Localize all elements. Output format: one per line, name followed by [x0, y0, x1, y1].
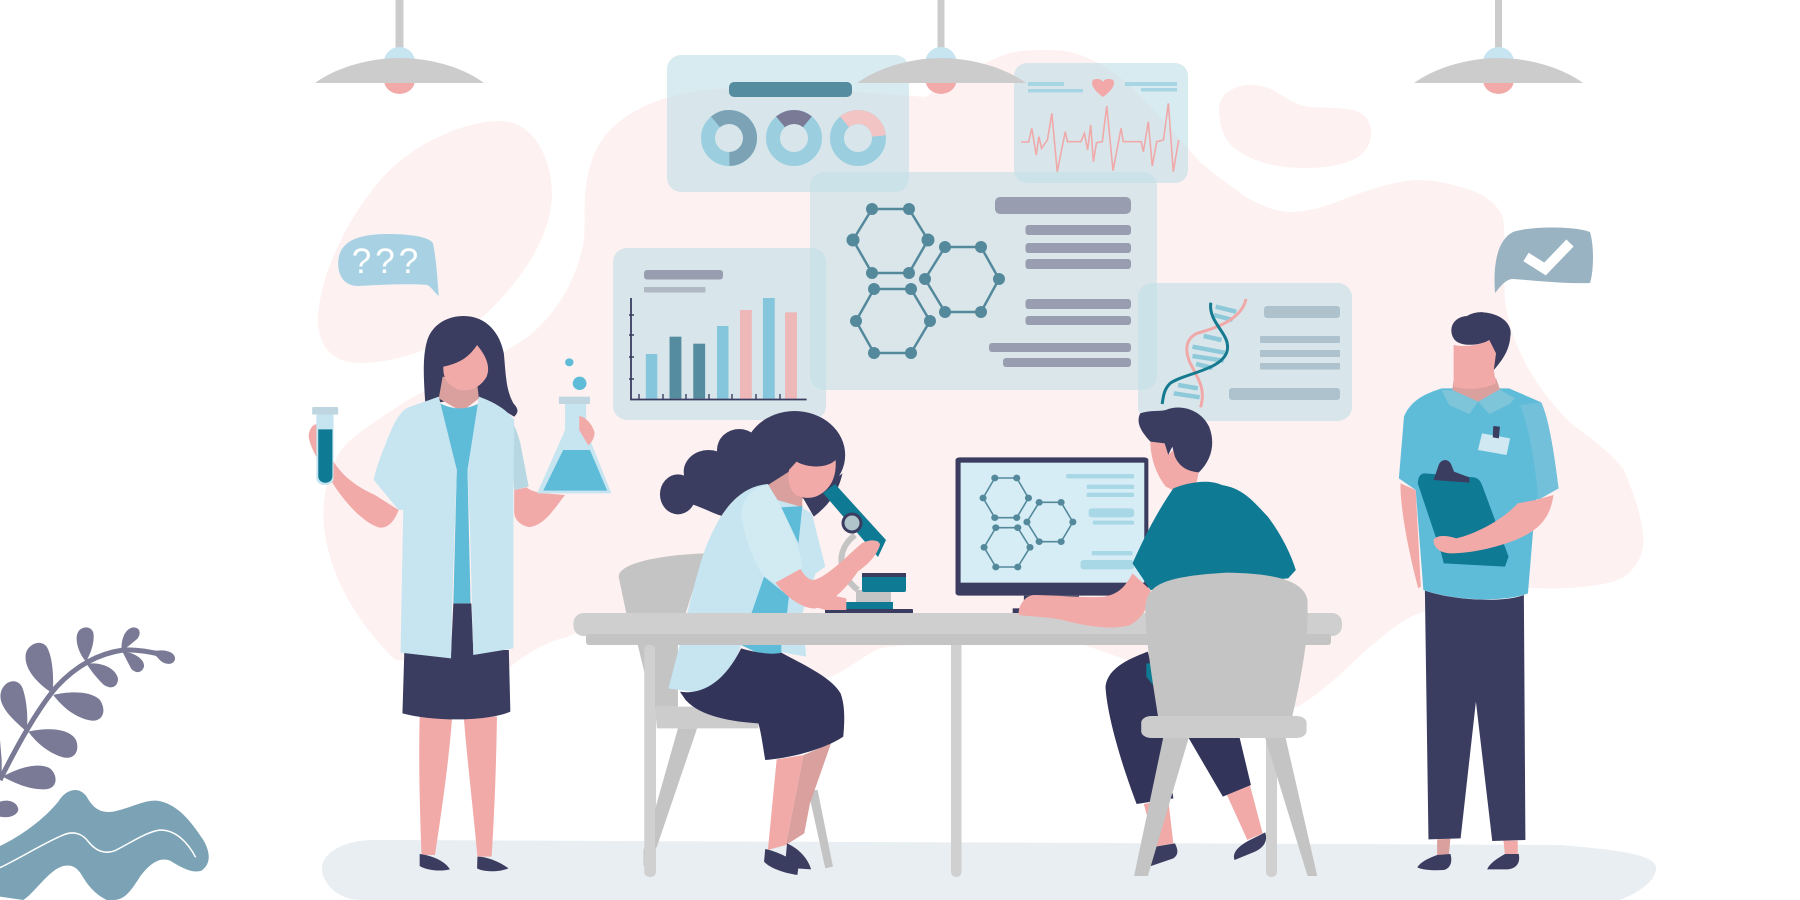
trousers — [1425, 591, 1525, 841]
character: standing woman with tube and flask — [309, 316, 611, 871]
ECG line — [1021, 103, 1179, 172]
panel: heart rate — [1014, 63, 1188, 183]
panel: DNA — [1138, 283, 1352, 421]
desk top — [574, 613, 1342, 645]
skirt — [680, 648, 844, 760]
microscope — [823, 484, 913, 614]
legs — [786, 743, 831, 845]
chair: man at computer — [1134, 573, 1317, 876]
speech bubble: check mark — [1495, 228, 1593, 293]
lamp 1 — [315, 0, 484, 94]
body — [309, 397, 611, 871]
test tube — [312, 407, 338, 485]
chair: woman at microscope — [619, 553, 833, 877]
axes — [629, 298, 807, 400]
lamp 3 — [1414, 0, 1583, 94]
arm — [1434, 495, 1553, 553]
body — [1399, 388, 1559, 870]
bars — [646, 298, 797, 399]
monitor — [956, 457, 1148, 613]
hair tail over shoulder — [490, 397, 517, 417]
head — [1442, 312, 1515, 414]
speech bubble: question marks — [338, 234, 439, 296]
background blobs — [318, 50, 1643, 707]
DNA helix — [1162, 299, 1246, 407]
text placeholder bars — [989, 197, 1131, 367]
lamp 2 — [857, 0, 1026, 94]
lamps — [315, 0, 1583, 94]
arm — [1019, 573, 1150, 627]
character: woman at microscope — [660, 411, 845, 875]
hair — [660, 411, 845, 517]
trousers — [1106, 652, 1173, 804]
panel: bar chart — [613, 248, 826, 420]
badge — [1478, 433, 1510, 455]
donut 3 — [828, 108, 888, 168]
icon: heart — [1092, 79, 1114, 97]
head and hair — [424, 316, 587, 417]
character: man at computer — [1019, 407, 1296, 868]
screen hexagons — [979, 475, 1076, 570]
plant — [0, 627, 175, 817]
panel: donut charts — [667, 55, 909, 192]
hair and face — [1150, 442, 1199, 492]
legs — [1144, 785, 1263, 847]
flask — [537, 397, 611, 493]
character: standing man with clipboard — [1399, 312, 1559, 870]
screen text bars — [1066, 474, 1134, 569]
wave bush — [0, 790, 209, 900]
shirt — [1399, 388, 1559, 599]
shirt — [1133, 482, 1296, 590]
floor — [322, 840, 1656, 900]
clipboard — [1418, 473, 1509, 567]
desk legs — [645, 640, 1277, 877]
hexagon molecules — [846, 203, 1005, 359]
donut 2 — [764, 108, 824, 168]
arm: woman at microscope — [776, 540, 880, 610]
speech bubble: question marks: ??? — [352, 242, 422, 281]
donut 1 — [699, 108, 759, 168]
lab coat — [668, 484, 825, 693]
panel: molecule structure — [810, 172, 1157, 390]
